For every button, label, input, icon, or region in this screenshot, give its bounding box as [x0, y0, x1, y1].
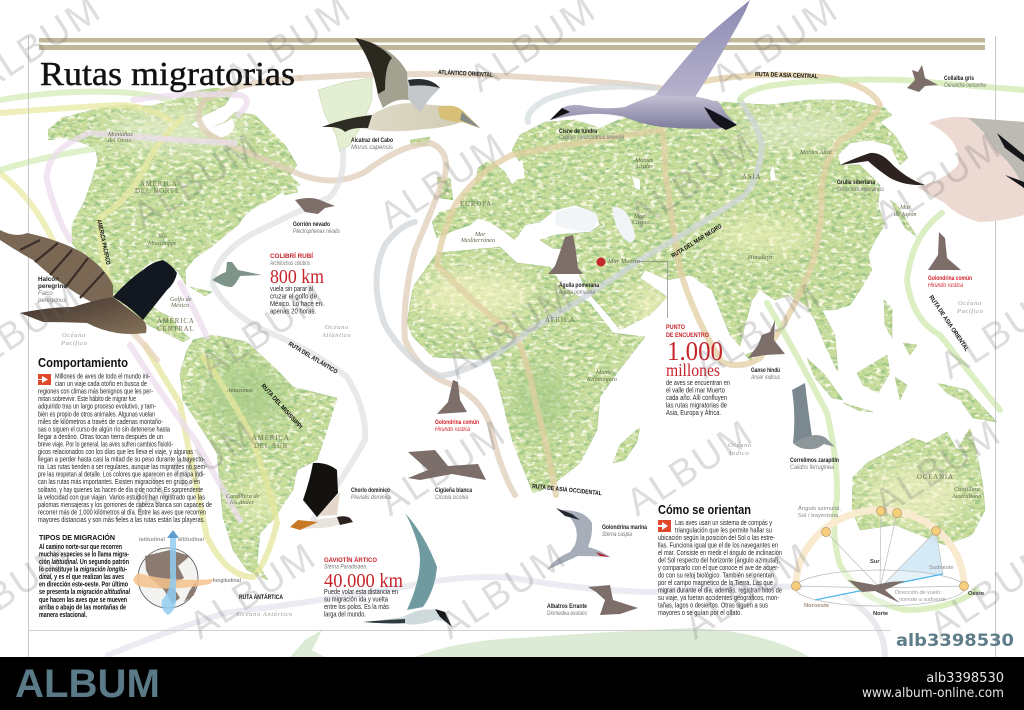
callout: hummingbird: apenas 20 horas.: [270, 306, 316, 316]
map labels: del Oeste: [108, 137, 131, 144]
watermark: ALBUM: [125, 126, 265, 238]
route: Atlantic east: [199, 78, 515, 495]
bird labels: Grulla siberiana: [837, 179, 875, 186]
silhouette: bar-headed goose: [748, 320, 785, 358]
watermark: ALBUM: [192, 276, 332, 388]
callout: meeting point: PUNTO: [666, 324, 685, 331]
callout: hummingbird: vuela sin parar al: [270, 284, 313, 293]
bird labels: Plectrophenax nivalis: [293, 229, 340, 235]
route: green west: [0, 92, 170, 170]
body text: el mar. Consiste en medir el ángulo de inclinación: [658, 548, 782, 557]
callout: meeting point: DE ENCUENTRO: [666, 332, 709, 339]
body text: arriba o abajo de las montañas de: [39, 602, 126, 611]
route labels: [95, 69, 970, 601]
globe diagram: longitudinal: [213, 578, 241, 584]
callout: hummingbird: 800 km: [270, 266, 324, 288]
map labels: Mar: [633, 213, 645, 220]
callout: hummingbird: [269, 251, 324, 316]
silhouette: white stork: [408, 450, 486, 480]
body text: adquirido tras un largo proceso evolutivo, y tam-: [38, 402, 156, 411]
map labels: de Japón: [894, 211, 917, 218]
bird labels: Sterna caspia: [602, 532, 633, 538]
body text: regiones con climas más benignos que les per-: [38, 387, 153, 396]
route: Antarctic: [108, 577, 800, 655]
map labels: Kilimanjaro: [586, 376, 617, 383]
body text: del Sol respecto del horizonte (ángulo azimutal),: [658, 556, 780, 564]
map labels: Índico: [728, 449, 749, 457]
body text: [658, 518, 782, 617]
islands: [190, 137, 997, 463]
bird labels: Albatros Errante: [547, 603, 587, 610]
map labels: Monte: [595, 369, 612, 376]
heading: Cómo se orientan: [658, 502, 751, 517]
bird labels: Cigüeña blanca: [435, 487, 472, 494]
callout: meeting point: [666, 324, 730, 417]
bird labels: Ciconia ciconia: [435, 495, 469, 501]
body text: y compararlo con el que conoce el ave de acuer-: [658, 563, 779, 572]
bird: caspian tern: [547, 508, 610, 570]
body text: llegan a perder hasta casi la mitad de su peso durante la trayecto-: [38, 455, 205, 464]
bird: hummingbird: [212, 262, 262, 287]
callout: arctic tern: 40.000 km: [324, 570, 403, 592]
callout: arctic tern: su migración ida y vuelta: [324, 594, 388, 604]
sun compass diagram: Norte: [873, 611, 889, 617]
silhouette: wheatear: [907, 65, 938, 92]
heading: Comportamiento: [38, 355, 128, 370]
sun compass diagram: noreste a sudoeste: [899, 597, 946, 603]
bird labels: Collalba gris: [944, 75, 974, 82]
bird labels: Golondrina común: [435, 419, 479, 426]
callout: meeting point: cada año. Allí confluyen: [666, 393, 727, 402]
route: pink: [47, 94, 247, 520]
callout: hummingbird: Archilochus colubris: [269, 261, 310, 267]
callout: hummingbird: COLIBRÍ RUBÍ: [270, 251, 313, 260]
map labels: Montañas: [107, 131, 133, 138]
Eurasia: [432, 100, 908, 372]
body text: do con su reloj biológico. También se orientan: [658, 570, 774, 580]
map labels: Océano: [325, 324, 349, 331]
route: Central Asia: [437, 75, 880, 495]
globe diagram: [134, 530, 241, 615]
callout: hummingbird: México. Lo hace en: [270, 299, 322, 308]
body text: mayores distancias y son más fieles a las rutas están las playeras.: [38, 515, 205, 524]
silhouette: lesser spotted eagle: [548, 235, 583, 274]
body text: ción latitudinal. Un segundo patrón: [39, 557, 129, 566]
body text: pre las respetan al detalle. Los colores que aparecen en el mapa indi-: [38, 470, 205, 479]
route: Pacific south: [145, 345, 277, 577]
map labels: los Andes: [230, 499, 254, 506]
Greenland: [318, 78, 372, 152]
bird labels: Diomedea exulans: [547, 611, 587, 617]
callout: meeting point: las rutas migratorias de: [666, 400, 727, 410]
map labels: Urales: [636, 163, 653, 170]
body text: gicos relacionados con los días que les lleva el viaje, y algunas: [38, 447, 193, 456]
map labels: [60, 131, 984, 618]
image id: alb3398530: [896, 631, 1014, 651]
globe diagram: latitudinal: [139, 537, 165, 543]
map labels: EUROPA: [460, 201, 492, 208]
Antarctica: [290, 628, 810, 657]
sun compass diagram: Sol / trayectoria: [798, 513, 839, 519]
Africa: [407, 247, 645, 493]
callout: Dead Sea marker: Mar Muerto: [607, 258, 641, 265]
silhouette: snow bunting: [295, 198, 335, 214]
bird labels: Águila pomerana: [559, 280, 599, 289]
icon: red arrow: [38, 374, 51, 385]
map labels: Montes Altai: [799, 149, 832, 156]
North America: [48, 88, 300, 342]
bird labels: Grus leucogeranus: [837, 187, 884, 193]
bird labels: Falco: [38, 291, 53, 297]
map labels: AMÉRICA: [140, 180, 178, 188]
map labels: DEL SUR: [254, 443, 288, 450]
body text: muchas especies se lo llama migra-: [39, 550, 129, 558]
map labels: AMÉRICA: [157, 317, 195, 325]
map labels: Golfo de: [170, 296, 192, 303]
bird: sandpiper: [792, 383, 835, 449]
map labels: México: [170, 302, 189, 309]
route labels: RUTA DE ASIA OCCIDENTAL: [532, 483, 602, 497]
route labels: RUTA DE ASIA CENTRAL: [755, 71, 818, 80]
callout: meeting point: millones: [666, 360, 720, 380]
Australia: [852, 428, 985, 545]
bird labels: Chorlo dominico: [351, 487, 390, 494]
body text: mayores o se guían por el olfato.: [658, 608, 742, 617]
map labels: Cordillera de: [226, 493, 260, 500]
callout: meeting point: 1.000: [667, 336, 723, 366]
silhouette: barn swallow west: [437, 380, 467, 414]
silhouette: barn swallow east: [928, 232, 961, 270]
footer logo: ALBUM: [15, 662, 160, 706]
title: Rutas migratorias: [40, 56, 295, 93]
body text: ria. Las rutas tienden a ser regulares, aunque las migrantes no siem-: [38, 462, 207, 471]
icon: suns: [792, 506, 968, 590]
bird: Siberian crane: [840, 117, 1024, 222]
map labels: ÁFRICA: [545, 316, 575, 324]
body text: por el campo magnético de la Tierra. Las que: [658, 578, 773, 587]
heading: TIPOS DE MIGRACIÓN: [39, 533, 115, 542]
route: East Asia: [907, 213, 1000, 410]
body text: miles de kilómetros a través de cadenas montaño-: [38, 417, 163, 426]
watermark: ALBUM: [677, 536, 817, 648]
body text: llegar a destino. Otras tocan tierra después de un: [38, 432, 163, 441]
body text: recorrer más de 1.000 kilómetros al día. Entre las aves que recorren: [38, 507, 206, 516]
map labels: Australiana: [951, 493, 981, 500]
body text: llas. Funciona igual que el de los navegantes en: [658, 540, 778, 550]
watermark: ALBUM: [182, 536, 322, 648]
map labels: DEL NORTE: [135, 188, 180, 195]
watermark: ALBUM: [622, 126, 762, 238]
bird labels: Morus capensis: [351, 145, 393, 151]
sun compass diagram: Sudoeste: [929, 565, 954, 571]
bird labels: peregrino: [38, 283, 67, 290]
callout: hummingbird: cruzar el golfo de: [270, 292, 317, 300]
bird labels: peregrinus: [37, 298, 66, 304]
inland seas: [205, 118, 776, 243]
map labels: Atlántico: [321, 332, 351, 339]
climate tints: [105, 110, 965, 525]
body text: manera estacional.: [39, 610, 87, 619]
body text: [39, 542, 131, 619]
route labels: AMÉRICA PACÍFICO: [95, 219, 112, 266]
map labels: AMÉRICA: [252, 434, 290, 442]
watermark: ALBUM: [122, 413, 262, 525]
route: Indian: [767, 303, 977, 610]
route labels: RUTA DEL MAR NEGRO: [670, 223, 723, 260]
panel: Comportamiento: [38, 355, 212, 524]
globe diagram: altitudinal: [178, 537, 204, 543]
body text: can las rutas más importantes. Existen migraciones en grupo o en: [38, 477, 200, 486]
body text: Al camino norte-sur que recorren: [39, 542, 122, 551]
map labels: Caspio: [632, 219, 650, 226]
body text: dinal, y es el que realizan las aves: [39, 572, 124, 581]
body text: en dirección este-oeste. Por último: [39, 580, 128, 589]
body text: que hacen las aves que se mueven: [39, 595, 127, 604]
route: Atlantic: [213, 150, 365, 520]
map labels: Mediterráneo: [460, 237, 495, 244]
map labels: Pacífico: [956, 308, 984, 315]
bird labels: [37, 75, 987, 617]
map labels: ASIA: [742, 174, 761, 181]
bird labels: Cisne de tundra: [559, 128, 597, 135]
map labels: Mar: [474, 231, 486, 238]
bird: plover: [290, 463, 353, 530]
bird labels: Gorrión nevado: [293, 221, 330, 228]
body text: mitan sobrevivir. Este hábito de migrar fue: [38, 394, 136, 403]
watermark: ALBUM: [619, 413, 759, 525]
bird labels: Golondrina común: [928, 275, 972, 282]
bird labels: Golondrina marina: [602, 524, 647, 531]
watermark: ALBUM: [867, 413, 1007, 525]
callout: meeting point: el valle del mar Muerto: [666, 386, 725, 394]
route: green Asia: [740, 80, 1024, 100]
silhouette: albatross: [588, 585, 638, 615]
icon: red arrow: [658, 520, 671, 532]
body text: palomas mensajeras y los gorriones de cabeza blanca son capaces de: [38, 500, 212, 509]
route labels: RUTA ANTÁRTICA: [239, 594, 283, 601]
body text: lo constituye la migración longitu-: [39, 565, 127, 574]
bird labels: Ganso hindú: [751, 367, 780, 374]
bird: swan: [550, 0, 750, 130]
callout: arctic tern: [324, 555, 403, 618]
body text: breve viaje. Por lo general, las aves sufren cambios fisioló-: [38, 440, 173, 448]
body text: se presenta la migración altitudinal: [39, 587, 131, 596]
body text: la velocidad con que viajan. Varios estudios han registrado que las: [38, 492, 205, 501]
map labels: Océano Antártico: [237, 611, 293, 618]
footer: [0, 657, 1024, 710]
bird: peregrine falcon: [0, 230, 177, 334]
panel: Tipos de migración: [39, 530, 241, 619]
body text: cian un viaje cada otoño en busca de: [55, 379, 147, 388]
map labels: Cordillera: [954, 486, 980, 493]
bird labels: Oenanthe oenanthe: [944, 83, 987, 89]
bird labels: Alcatraz del Cabo: [351, 137, 393, 144]
callout: meeting point: Asia, Europa y África.: [666, 408, 721, 417]
sun compass diagram: Sur: [870, 559, 880, 565]
watermark: ALBUM: [432, 536, 572, 648]
body text: tañas, lagos o desiertos. Otras siguen a sus: [658, 600, 768, 610]
route: Atlantic east top: [300, 74, 660, 88]
route: Black Sea: [528, 86, 655, 122]
route: tan Central America: [133, 333, 157, 360]
route labels: ATLÁNTICO ORIENTAL: [438, 69, 493, 79]
bird labels: Aquila pomarina: [558, 290, 596, 296]
sun compass diagram: Oeste: [968, 591, 985, 597]
body text: [38, 372, 212, 524]
body text: su viaje, ya fueran accidentes geográficos, mon-: [658, 593, 779, 602]
route labels: RUTA DEL ATLÁNTICO: [287, 341, 339, 376]
route: Pacific yellow: [0, 105, 182, 290]
sun compass diagram: Dirección de vuelo:: [895, 590, 942, 596]
bird labels: Calidris ferruginea: [790, 465, 835, 471]
callout: meeting point: de aves se encuentran en: [666, 378, 730, 387]
footer id: alb3398530: [926, 671, 1004, 686]
callout: arctic tern: GAVIOTÍN ÁRTICO: [324, 555, 377, 564]
sun compass diagram: [792, 505, 985, 617]
footer url: www.album-online.com: [862, 686, 1004, 701]
header bars: [39, 38, 985, 50]
route: Antarctic arc: [845, 597, 885, 657]
callout: arctic tern: larga del mundo.: [324, 610, 366, 618]
body text: bién es propio de otros animales. Algunas vuelan: [38, 409, 155, 418]
sun compass diagram: Ángulo azimutal,: [798, 505, 841, 512]
body text: migran durante el día, además, registran hitos de: [658, 586, 782, 594]
silhouettes: [295, 65, 961, 615]
callout: Dead Sea marker: [596, 258, 668, 318]
bird labels: Anser indicus: [750, 375, 780, 381]
map labels: Océano: [958, 300, 982, 307]
map labels: Océano: [62, 332, 86, 339]
bird labels: Correlimos zarapitín: [790, 457, 839, 464]
watermark: ALBUM: [372, 126, 512, 238]
bird labels: Halcón: [38, 276, 59, 283]
watermark: ALBUM: [439, 276, 579, 388]
route: Black Sea south: [376, 100, 762, 376]
body text: Las aves usan un sistema de compás y: [675, 518, 772, 527]
map labels: Mississippi: [147, 240, 176, 247]
map labels: Río: [157, 233, 167, 240]
watermark: ALBUM: [687, 276, 827, 388]
body text: ubicación según la posición del Sol o las estre-: [658, 533, 775, 542]
watermark: ALBUM: [372, 413, 512, 525]
map labels: OCEANÍA: [917, 473, 954, 481]
map labels: CENTRAL: [157, 326, 195, 333]
route labels: RUTA DE ASIA ORIENTAL: [927, 294, 970, 353]
bird labels: Hirundo rustica: [435, 427, 471, 433]
route labels: RUTA DEL MISISSIPPI: [260, 383, 304, 431]
sun compass diagram: Noroeste: [804, 603, 830, 609]
watermark: ALBUM: [867, 126, 1007, 238]
panel: Cómo se orientan: [658, 502, 782, 617]
body text: sas o siguen el curso de algún río sin detenerse hasta: [38, 424, 170, 433]
callout: arctic tern: Puede volar esta distancia en: [324, 587, 398, 596]
callout: arctic tern: entre los polos. Es la más: [324, 602, 389, 611]
land masses: [48, 88, 997, 580]
body text: solitario, y hay quienes las hacen de día o de noche. Es sorprendente: [38, 485, 203, 494]
bird labels: Hirundo rustica: [928, 283, 964, 289]
callout: arctic tern: Sterna Paradisaea: [324, 564, 367, 570]
map labels: Amazonas: [226, 387, 253, 394]
bird: arctic tern: [363, 513, 452, 627]
map labels: Pacífico: [60, 340, 88, 347]
body text: triangulación que les permite hallar su: [675, 526, 772, 534]
map labels: Himalaya: [747, 254, 772, 261]
bird labels: Cygnus columbianus bewickii: [559, 135, 625, 141]
body text: Millones de aves de todo el mundo ini-: [55, 372, 150, 380]
bird labels: Pluvialis dominica: [351, 495, 392, 501]
map labels: Montes: [634, 157, 654, 164]
map labels: Océano: [728, 442, 752, 449]
bird: gannet: [322, 38, 480, 132]
South America: [180, 335, 337, 580]
map labels: Mar: [899, 204, 911, 211]
